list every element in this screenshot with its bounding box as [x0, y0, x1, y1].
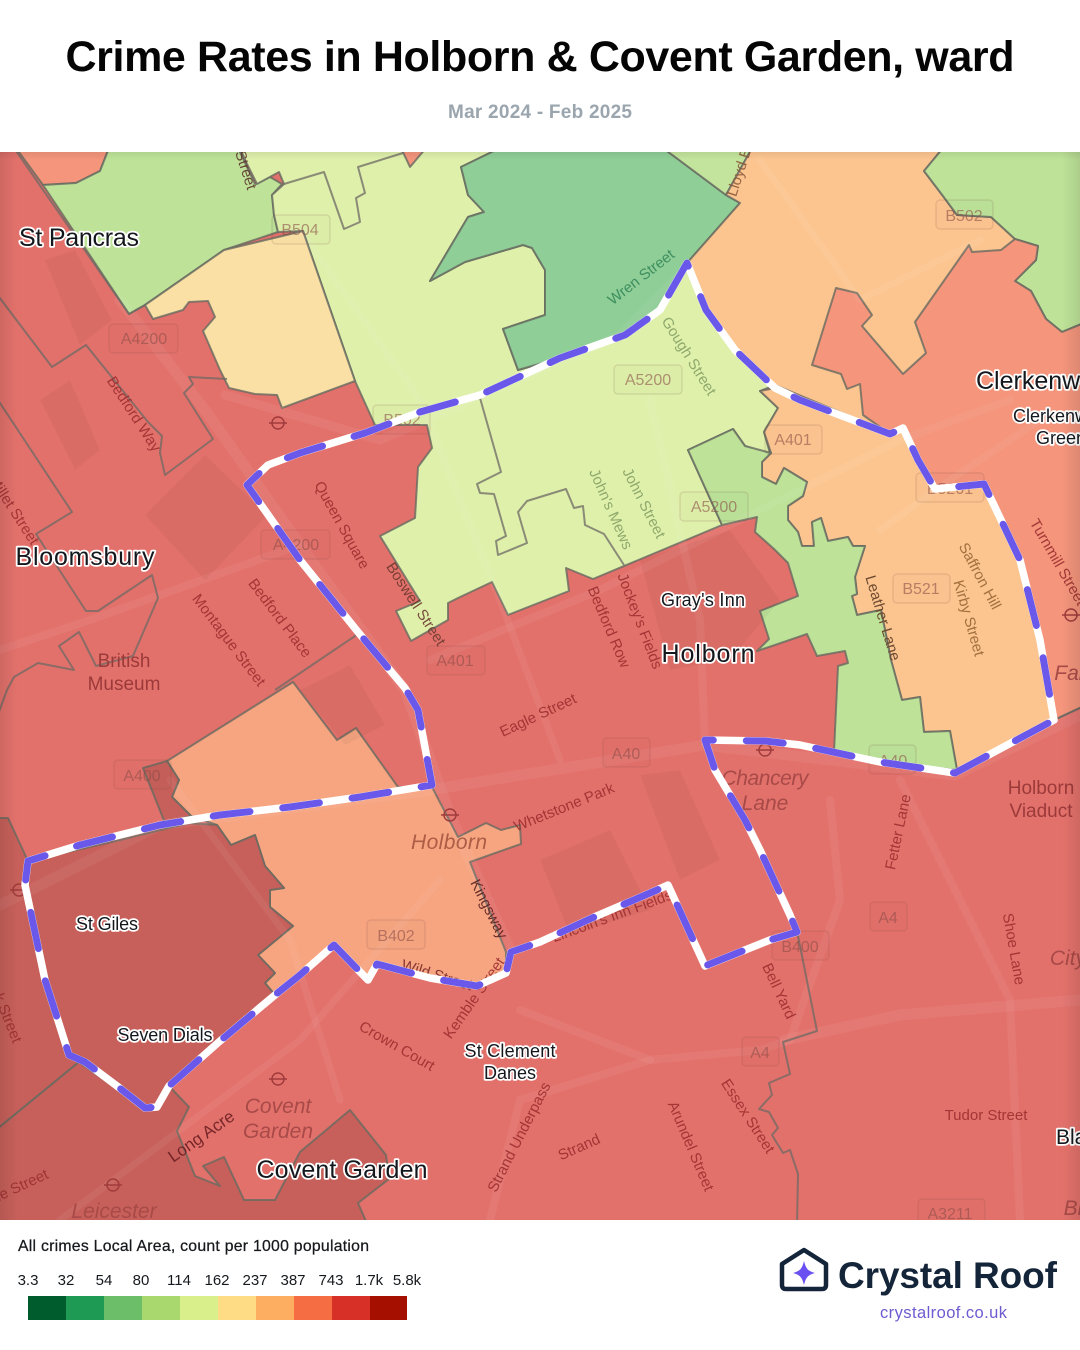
street name labels: Tudor Street [945, 1107, 1028, 1124]
street name labels: Leather Lane [861, 573, 904, 663]
street name labels: John Street [619, 465, 669, 542]
legend values: 54 [96, 1272, 112, 1289]
legend [18, 1238, 422, 1320]
station and place names in italics: Lane [742, 792, 788, 815]
map base: high crime red [0, 152, 1080, 1220]
street name labels: Strand Underpass [484, 1080, 554, 1195]
legend values: 387 [280, 1272, 306, 1289]
street name labels: Bell Yard [758, 961, 799, 1022]
street name labels: Kingsway [466, 877, 511, 942]
landmark names: British [98, 651, 150, 672]
area name labels: St Giles [76, 914, 138, 934]
road number plates: A4200 [121, 331, 167, 348]
area name labels: St Clement [464, 1041, 556, 1061]
title: Crime Rates in Holborn & Covent Garden, ward [66, 33, 1014, 81]
station and place names in italics: Garden [243, 1120, 313, 1143]
street name labels: Kirby Street [950, 578, 988, 659]
ward boundary: purple dashes [25, 263, 1054, 1108]
brand logo [782, 1250, 1058, 1322]
street name labels: Street [231, 148, 260, 193]
brand url: crystalroof.co.uk [880, 1304, 1008, 1322]
street network and building blocks [0, 250, 1014, 1220]
boundary lines on red areas [0, 148, 1080, 1226]
road number plates: B502 [945, 208, 983, 225]
road number plates: A40 [879, 753, 907, 770]
street name labels: Wren Street [605, 246, 679, 309]
station and place names in italics: Chancery [722, 767, 810, 790]
legend values [18, 1272, 422, 1289]
street name labels: Fetter Lane [882, 793, 915, 871]
road number plates [109, 200, 993, 1228]
area name labels: St Pancras [19, 224, 139, 252]
legend values: 32 [58, 1272, 74, 1289]
legend values: 743 [318, 1272, 344, 1289]
brand name: Crystal Roof [838, 1255, 1058, 1296]
area name labels: Seven Dials [118, 1025, 212, 1045]
station and place names in italics: Holborn [411, 831, 487, 854]
road number plates: B521 [902, 581, 940, 598]
road number plates: A4 [878, 910, 898, 927]
road number plates: A400 [123, 768, 161, 785]
street name labels: Crown Court [356, 1018, 438, 1075]
street name labels: Kemble Street [440, 954, 509, 1042]
street name labels: Saffron Hill [955, 540, 1004, 612]
road number plates: A5200 [625, 372, 671, 389]
station and place names in italics: Leicester [71, 1200, 158, 1223]
legend values: 5.8k [393, 1272, 422, 1289]
area name labels: Holborn [662, 640, 754, 668]
street name labels: Jockey's Fields [613, 571, 666, 671]
street name labels: Shoe Lane [999, 912, 1028, 986]
road number plates: A401 [436, 653, 474, 670]
zones: crime rate areas [0, 148, 1080, 1226]
area name labels: Covent Garden [256, 1156, 428, 1184]
area name labels: Gray's Inn [661, 590, 745, 610]
landmark names: Holborn [1008, 778, 1074, 799]
road number plates: A3211 [927, 1206, 973, 1223]
legend values: 114 [167, 1272, 191, 1289]
road number plates: B402 [377, 928, 415, 945]
station and place names in italics [71, 662, 1080, 1223]
area name labels: Bloomsbury [16, 543, 155, 571]
legend values: 237 [242, 1272, 268, 1289]
legend colour scale [28, 1296, 407, 1320]
street name labels: Eagle Street [497, 690, 580, 741]
street name labels: Strand [556, 1131, 603, 1164]
subtitle: date range: Mar 2024 - Feb 2025 [448, 102, 632, 123]
road number plates: A401 [774, 432, 812, 449]
ward boundary: white base line [25, 263, 1054, 1108]
legend heading: All crimes Local Area, count per 1000 population [18, 1238, 369, 1255]
road number plates: A4200 [273, 537, 319, 554]
street name labels [0, 146, 1080, 1205]
street name labels: Bedford Place [244, 576, 315, 661]
street name labels: Bedford Way [103, 374, 164, 455]
legend values: 162 [204, 1272, 230, 1289]
street name labels: Lincoln's Inn Fields [550, 887, 675, 946]
tube station roundels [10, 417, 1080, 1191]
street name labels: Whetstone Park [512, 779, 617, 835]
area name labels: Danes [484, 1063, 536, 1083]
street name labels: Queen Square [310, 478, 373, 572]
road number plates: A5200 [691, 499, 737, 516]
street name labels: Arundel Street [664, 1099, 717, 1194]
icon: house with star [782, 1250, 826, 1289]
landmark names: Viaduct [1009, 801, 1073, 822]
legend values: 3.3 [18, 1272, 38, 1289]
road number plates: A4 [750, 1045, 770, 1062]
area name labels [16, 224, 1080, 1184]
road number plates: B502 [383, 412, 421, 429]
road number plates: B5201 [927, 481, 973, 498]
road number plates: A40 [612, 746, 640, 763]
legend values: 80 [133, 1272, 149, 1289]
landmark names: Museum [88, 674, 160, 695]
map edge shading [0, 152, 1080, 1220]
street name labels: Wild Street [399, 957, 475, 995]
station and place names in italics: Covent [245, 1095, 312, 1118]
street name labels: Lloyd B [724, 146, 755, 199]
landmark names [88, 651, 1074, 822]
street name labels: Long Acre [164, 1107, 238, 1166]
street name labels: Montague Street [188, 591, 269, 690]
street name labels: John's Mews [585, 466, 636, 552]
legend values: 1.7k [355, 1272, 384, 1289]
street name labels: Gough Street [658, 314, 720, 399]
street name labels: Boswell Street [382, 559, 449, 650]
street name labels: Bedford Row [584, 584, 633, 671]
road number plates: B504 [281, 222, 319, 239]
road number plates: B400 [781, 939, 819, 956]
street name labels: Essex Street [717, 1076, 778, 1157]
